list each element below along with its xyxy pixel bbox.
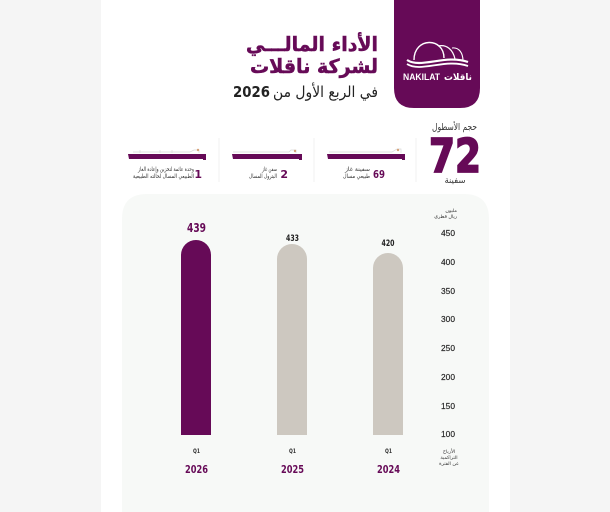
axis footnote	[439, 448, 459, 467]
y axis labels: 250	[441, 343, 455, 353]
axis footnote: الأرباح	[443, 448, 455, 455]
y axis labels: 150	[441, 401, 455, 411]
logo wordmark	[403, 72, 472, 83]
subtitle: 2026	[233, 83, 270, 101]
stat: LPG carriers: 2	[280, 168, 288, 181]
icon: LNG carrier ship	[327, 149, 405, 160]
white page column	[101, 0, 510, 512]
bar: Q1 2025: Q1	[289, 447, 296, 455]
stat: LPG carriers: البترول المسال	[249, 174, 277, 180]
axis footnote: التراكمية	[440, 455, 458, 461]
stat: LNG carriers: سفينة غاز	[344, 167, 370, 173]
logo badge	[394, 0, 480, 108]
icon: FSRU vessel	[128, 149, 206, 160]
fleet size stat: حجم الأسطول	[432, 121, 477, 133]
fleet size stat: 72	[429, 129, 481, 183]
panel: revenue chart	[122, 194, 489, 512]
y axis labels: 450	[441, 228, 455, 238]
bar: Q1 2026: 2026	[185, 463, 208, 476]
y axis labels: 400	[441, 257, 455, 267]
stat: FSRU: وحدة عائمة لتخزين وإعادة الغاز	[137, 167, 194, 173]
stat: LPG carriers	[232, 150, 302, 181]
y axis labels: 100	[441, 429, 455, 439]
bar: Q1 2024: Q1	[385, 447, 392, 455]
bar: Q1 2024: 420	[382, 239, 395, 249]
bar: Q1 2025	[277, 234, 307, 476]
axis title: ريال قطري	[434, 214, 458, 220]
stat: LPG carriers: سفن غاز	[261, 167, 277, 173]
title: الأداء المالـــي	[246, 31, 378, 56]
y axis labels: 350	[441, 286, 455, 296]
stat: LNG carriers: 69	[373, 168, 385, 181]
icon: Nakilat domes and waves	[407, 42, 468, 67]
stat: FSRU: الطبيعي المسال لحالته الطبيعية	[133, 174, 194, 180]
logo wordmark: ناقلات	[444, 73, 472, 83]
icon: LPG carrier ship	[232, 150, 302, 160]
stat: LNG carriers: طبيعي مسال	[343, 174, 370, 180]
bar: Q1 2025: 2025	[281, 463, 304, 476]
axis title	[434, 208, 458, 220]
bar: Q1 2026: 439	[187, 221, 206, 235]
fleet size stat	[429, 121, 481, 186]
bar: Q1 2025: 433	[286, 234, 299, 244]
bar: Q1 2024: 2024	[377, 463, 400, 476]
bar: Q1 2026: Q1	[193, 447, 200, 455]
stat: FSRU	[128, 149, 206, 181]
title: لشركة ناقلات	[250, 55, 378, 78]
y axis labels: 300	[441, 314, 455, 324]
subtitle	[233, 82, 378, 102]
y axis labels	[441, 228, 455, 439]
title	[246, 31, 378, 78]
subtitle: في الربع الأول من	[273, 82, 378, 102]
axis title: مليون	[445, 208, 457, 214]
stat: FSRU: 1	[194, 168, 202, 181]
divider lines	[219, 138, 416, 182]
bar: Q1 2024	[373, 239, 403, 476]
stat: LNG carriers	[327, 149, 405, 181]
fleet size stat: سفينة	[444, 176, 466, 186]
bar: Q1 2026	[181, 221, 211, 476]
logo wordmark: NAKILAT	[403, 72, 440, 82]
y axis labels: 200	[441, 372, 455, 382]
axis footnote: عن الفترة	[439, 461, 459, 467]
